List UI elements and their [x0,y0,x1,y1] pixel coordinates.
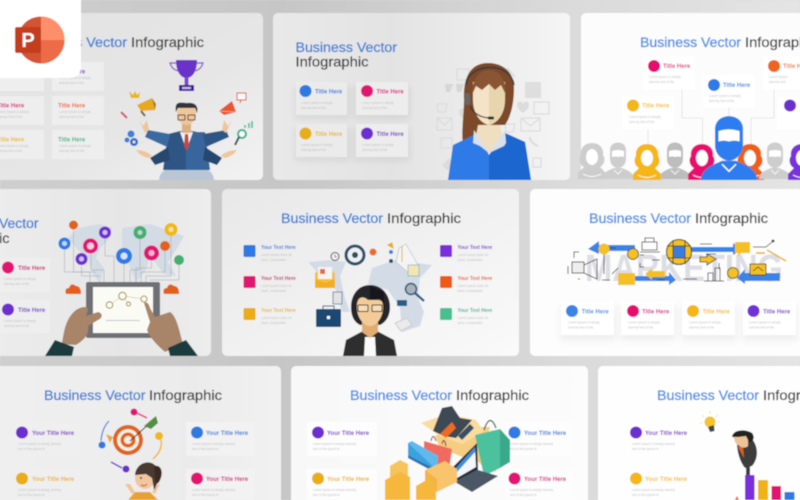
cards: Lorem Ipsum is simply [362,101,394,105]
left and right list items: Your Text Here [261,276,296,282]
cards: Your Title Here [645,477,688,483]
left and right list items: Your Text Here [261,308,296,314]
cards: dummy text of the [59,149,85,153]
icon: light bulb [700,411,720,432]
left and right list items: Your Text Here [261,245,296,251]
cards: Title Here [18,266,46,272]
cards: dummy text [769,80,786,84]
title: Business Vector [24,35,128,50]
cards: dummy text of the [4,324,30,328]
title: Infographic [695,211,768,226]
cards: dummy text of the [301,148,327,152]
cards: dummy text of the [689,326,715,330]
title [589,211,768,226]
cards: Your Title Here [32,431,75,437]
cards: Lorem Ipsum is simply [4,277,36,281]
cards: dummy text of the [568,326,594,330]
left and right list items: Your Text Here [458,276,493,282]
cards [0,258,50,333]
bar chart [735,475,794,500]
cards: Title Here [58,104,86,110]
cards: text of the ipsum is [632,447,659,451]
cards: Lorem Ipsum is simply [4,319,36,323]
panel: manager with trophy [0,13,263,180]
cards: dummy text of the [59,81,85,85]
title: Business Vector [350,388,453,403]
left and right list items: amet, consectetur [261,289,287,293]
title [350,388,529,403]
dotted connectors [648,90,774,146]
cards: Title Here [315,132,343,138]
cards: Title Here [18,308,46,314]
illustration: girl [125,462,162,500]
panel: idea and growth [598,366,800,500]
cards: Lorem Ipsum is simply [59,144,91,148]
title [657,388,800,403]
cards: Lorem Ipsum is simply [649,75,681,79]
cards: Your Title Here [645,431,688,437]
cards: Lorem Ipsum is simply dummy [18,442,61,446]
icon: PowerPoint: P [21,30,35,52]
cards: Lorem Ipsum is simply [689,320,721,324]
cards: text of the ipsum is [313,493,340,497]
left and right list items: Lorem Ipsum dolor sit [458,316,488,320]
title: Business Vector [589,211,692,226]
team silhouettes [578,116,800,180]
cloud icons [65,284,179,294]
cards: Lorem Ipsum is simply [301,143,333,147]
panel: online shopping [291,366,588,500]
left and right list items [244,245,493,325]
cards: Lorem Ipsum is simply [59,110,91,114]
title: Infographic [296,54,369,70]
cards [8,422,254,500]
panel: marketing [530,189,800,356]
illustration: woman with headset [448,63,531,180]
panel: tablet and world map [0,189,211,356]
cards: Title Here [582,310,609,316]
cards [0,62,104,159]
globe icon [666,240,692,264]
cards: text of the ipsum is [18,493,45,497]
left and right list items: amet, consectetur [261,258,287,262]
left and right list items: amet, consectetur [458,258,484,262]
PowerPoint logo badge [0,0,81,78]
title [640,35,800,50]
background support icons [437,68,549,171]
cards: Lorem Ipsum is simply [749,320,781,324]
cards: Title Here [642,104,670,110]
world map [68,224,184,284]
cards: Lorem Ipsum is simply dummy [510,442,553,446]
cards: Your Title Here [32,477,75,483]
cards: Lorem Ipsum is simply dummy [192,442,235,446]
title: Infographic [149,388,222,403]
cards: text of the ipsum is [510,493,537,497]
left and right list items: amet, consectetur [458,289,484,293]
cards: text of the ipsum is [192,447,219,451]
title: Business Vector [657,388,760,403]
cards: dummy text of the [709,99,735,103]
cards: Title Here [376,90,404,96]
connector lines [64,226,179,285]
cards: text of the ipsum is [192,493,219,497]
cards: Lorem Ipsum is simply [709,94,741,98]
title [24,35,204,50]
cards: Title Here [376,132,404,138]
left and right list items: Lorem Ipsum dolor sit [261,284,292,288]
title [281,211,461,226]
title: Infographic [131,35,204,50]
yellow note icons [618,242,750,285]
cards: dummy text of the [628,326,654,330]
cards: Title Here [702,310,730,316]
cards: Your Title Here [327,431,370,437]
title [44,388,222,403]
soft card shadows [560,305,798,341]
cards: dummy text of the [4,282,30,286]
cards: Lorem Ipsum is simply [362,143,394,147]
left and right list items: amet, consectetur [458,321,484,325]
cards: Title Here [763,310,791,316]
cards: Your Title Here [206,431,249,437]
left and right list items: Lorem Ipsum dolor sit [458,284,488,288]
cards [622,56,800,130]
cards: Title Here [58,138,86,144]
cards [625,422,695,500]
left and right list items: Your Text Here [458,308,493,314]
hands holding the tablet [45,302,198,356]
cards: Your Title Here [524,431,567,437]
title: Business Vector [281,211,384,226]
cards: Lorem Ipsum is simply [568,320,600,324]
left and right list items: amet, consectetur [261,321,287,325]
cards [296,82,408,157]
illustration: open box and shopping [385,406,510,500]
cards: Lorem Ipsum is simply [629,115,661,119]
left and right list items: Lorem Ipsum dolor sit [261,316,292,320]
tablet with chart [86,282,160,338]
cards: Lorem Ipsum is simply dummy [313,442,356,446]
cards: dummy text of the [362,148,388,152]
cards: text of the ipsum is [18,447,45,451]
cards: Lorem Ipsum is simply [59,76,91,80]
icons floating around the man [121,91,252,146]
title: Infographic [456,388,529,403]
cards: dummy text of the [59,115,85,119]
cards: Title Here [663,64,691,70]
title: Business Vector [296,40,398,55]
illustration: woman with glasses [343,285,397,356]
cards: Your Title Here [524,477,567,483]
cards: Lorem Ipsum is simply dummy [18,488,61,492]
cards: Your Title Here [327,477,370,483]
blue arrows [588,241,780,285]
cards: Lorem Ipsum is simply dummy [632,442,675,446]
cards: dummy text of the [749,326,775,330]
title: Business Vector [44,388,146,403]
title: Infographic [387,211,461,226]
cards: dummy text of the [629,120,655,124]
target with arrow [98,408,163,472]
cards: text of the ipsum is [313,447,340,451]
icon: trophy [170,60,203,91]
left and right list items: Lorem Ipsum dolor sit [261,253,292,257]
left and right list items: Lorem Ipsum dolor sit [458,253,488,257]
world map [308,260,432,332]
title: Business Vector [640,35,742,50]
cards: Lorem Ipsum is simply dummy [313,488,356,492]
panel: team members [578,13,800,180]
cards: Title Here [58,70,86,76]
cards: Lorem Ipsum [769,75,788,79]
cards: Title Here [723,83,751,89]
cards: dummy text of the [301,106,327,110]
cards: dummy text of the [362,106,388,110]
office icons around the woman [315,243,424,331]
panel: woman with glasses [222,189,519,356]
soft card shadows [294,86,410,161]
title: Vector [0,216,39,231]
cards: Lorem Ipsum is simply [301,101,333,105]
cards: text of the ipsum is [632,493,659,497]
title [0,216,39,246]
cards: Your Title Here [206,477,249,483]
illustration: businessman with four arms [136,103,237,180]
panel: customer support [273,13,570,180]
cards: Lorem Ipsum is simply dummy [192,488,235,492]
cards: Lorem Ipsum is simply [628,320,660,324]
cards: Title Here [642,310,670,316]
map pin icons [58,220,184,265]
cards: text of the ipsum is [510,447,537,451]
cards [561,301,796,335]
cards: Title Here [315,90,343,96]
cards [307,422,575,500]
cards: dummy text of the [649,80,675,84]
marketing line icons [568,238,786,281]
title [296,40,398,70]
cards: Lorem Ipsum is simply dummy [632,488,675,492]
cards: Lorem Ipsum is simply dummy [510,488,553,492]
left and right list items: Your Text Here [458,245,493,251]
panel: target and arrow [0,366,281,500]
illustration: businessman standing on chart [732,430,757,475]
